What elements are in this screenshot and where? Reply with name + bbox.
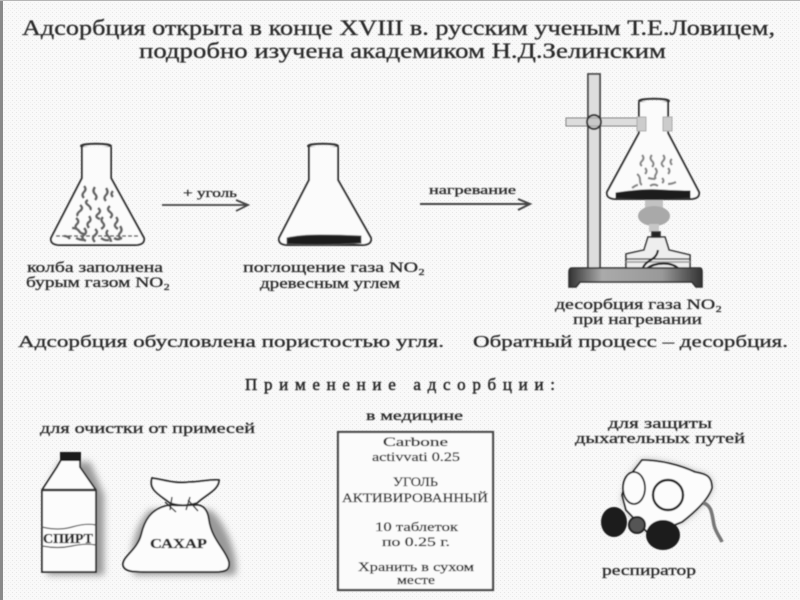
heated flask (607, 99, 699, 200)
icon: respirator mask (601, 460, 722, 550)
activated charcoal package: activvati 0.25 (372, 449, 460, 464)
flask 2 caption: древесным углем (260, 276, 401, 292)
arrow: heating: нагревание (429, 182, 516, 197)
stand base (569, 268, 702, 287)
flask 3 caption: при нагревании (573, 312, 702, 328)
burner (626, 232, 690, 272)
activated charcoal package: Хранить в сухом (358, 559, 474, 574)
icon: bottle (42, 452, 104, 575)
strap (703, 503, 722, 542)
flask 3 caption (555, 297, 722, 328)
activated charcoal package: месте (397, 572, 435, 587)
gas squiggles (64, 186, 122, 242)
flame (638, 200, 670, 232)
activated charcoal package: УГОЛЬ (393, 474, 439, 489)
airway protection heading (575, 416, 745, 447)
charcoal (616, 190, 690, 200)
respirator caption: респиратор (602, 563, 696, 579)
stand rod (588, 74, 600, 272)
activated charcoal package: по 0.25 г. (382, 534, 450, 549)
flask 2 caption (243, 260, 425, 292)
title: подробно изучена академиком Н.Д.Зелинским (139, 38, 666, 63)
flask 3 caption: десорбция газа NO₂ (555, 297, 722, 313)
purification heading: для очистки от примесей (40, 421, 255, 437)
clamp (566, 115, 644, 129)
activated charcoal package: Carbone (383, 434, 448, 449)
activated charcoal package: 10 таблеток (375, 519, 459, 534)
activated charcoal package (338, 432, 493, 590)
statement: porosity: Адсорбция обусловлена пористостью угля. (18, 332, 444, 351)
respirator filters (601, 507, 680, 550)
arrow: heating (420, 182, 530, 210)
medicine heading: в медицине (366, 409, 463, 424)
icon: sugar sack (123, 478, 236, 575)
flask 2 caption: поглощение газа NO₂ (243, 260, 425, 276)
charcoal layer (287, 235, 361, 245)
flask 1 caption (26, 260, 170, 291)
arrow: add charcoal (162, 185, 248, 211)
flask 1 caption: колба заполнена (27, 260, 163, 276)
title: Адсорбция открыта в конце XVIII в. русским ученым Т.Е.Ловицем, (22, 15, 775, 40)
airway protection heading: дыхательных путей (575, 431, 745, 447)
icon: sugar sack: САХАР (150, 537, 208, 552)
arrow: add charcoal: + уголь (183, 185, 237, 200)
activated charcoal package: АКТИВИРОВАННЫЙ (342, 490, 488, 505)
flask 1 caption: бурым газом NO₂ (26, 275, 170, 291)
title (22, 15, 775, 63)
flask with gas NO2 (51, 144, 144, 245)
icon: bottle: СПИРТ (43, 532, 94, 547)
statement: desorption: Обратный процесс – десорбция. (473, 332, 788, 351)
section heading: Применение адсорбции: (245, 375, 555, 394)
flask with charcoal (279, 144, 371, 245)
airway protection heading: для защиты (608, 416, 712, 432)
lab stand with flask and burner (566, 74, 702, 287)
